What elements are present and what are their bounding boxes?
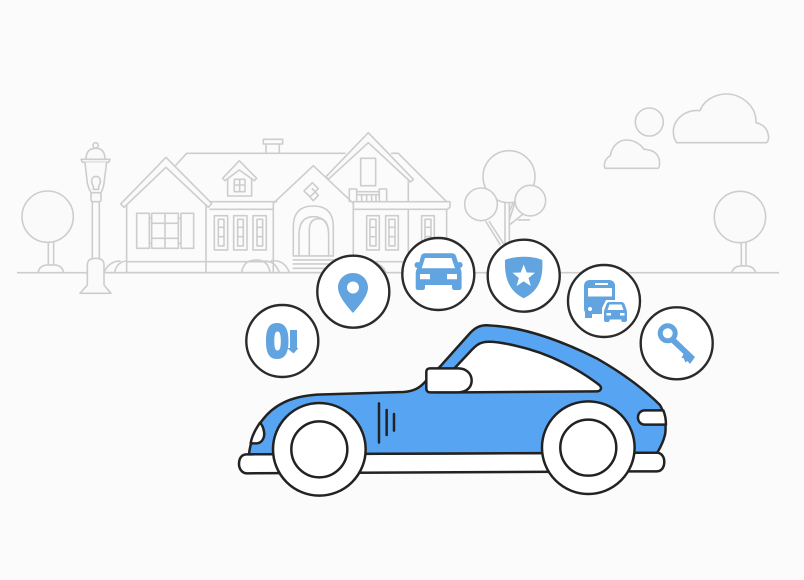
car: body	[249, 325, 666, 454]
icon badge: car	[402, 238, 474, 310]
main roof and chimney	[176, 139, 447, 202]
left gable wing	[121, 157, 277, 273]
car: front wheel	[273, 403, 366, 496]
house	[104, 133, 450, 273]
icon badge: key	[641, 307, 713, 379]
right gable wing	[326, 133, 450, 273]
tree: centre	[465, 151, 546, 244]
tree: right	[714, 191, 766, 273]
sun	[635, 108, 663, 136]
cloud: large	[673, 94, 769, 143]
icon badge: shield with star	[488, 240, 560, 312]
cloud: small	[604, 140, 660, 168]
ground line	[17, 272, 779, 274]
car: lower skirt	[239, 453, 664, 473]
car: side window	[437, 342, 601, 392]
car: door vents	[379, 403, 394, 443]
icon badge: location pin	[317, 256, 389, 328]
bushes	[104, 260, 386, 273]
house base line	[104, 270, 447, 275]
car: rear wheel	[542, 401, 635, 494]
car	[239, 325, 666, 496]
middle windows	[214, 216, 266, 250]
car: side mirror	[426, 368, 472, 392]
car: headlight	[251, 423, 264, 443]
dormer	[223, 161, 257, 196]
street lamp	[80, 143, 111, 293]
entry gable and door	[273, 166, 353, 273]
icon badge: odometer	[246, 305, 318, 377]
car: rear light	[638, 410, 666, 425]
icon badge: bus and car	[568, 265, 640, 337]
tree: left	[22, 191, 73, 272]
clouds and sun	[604, 94, 769, 168]
